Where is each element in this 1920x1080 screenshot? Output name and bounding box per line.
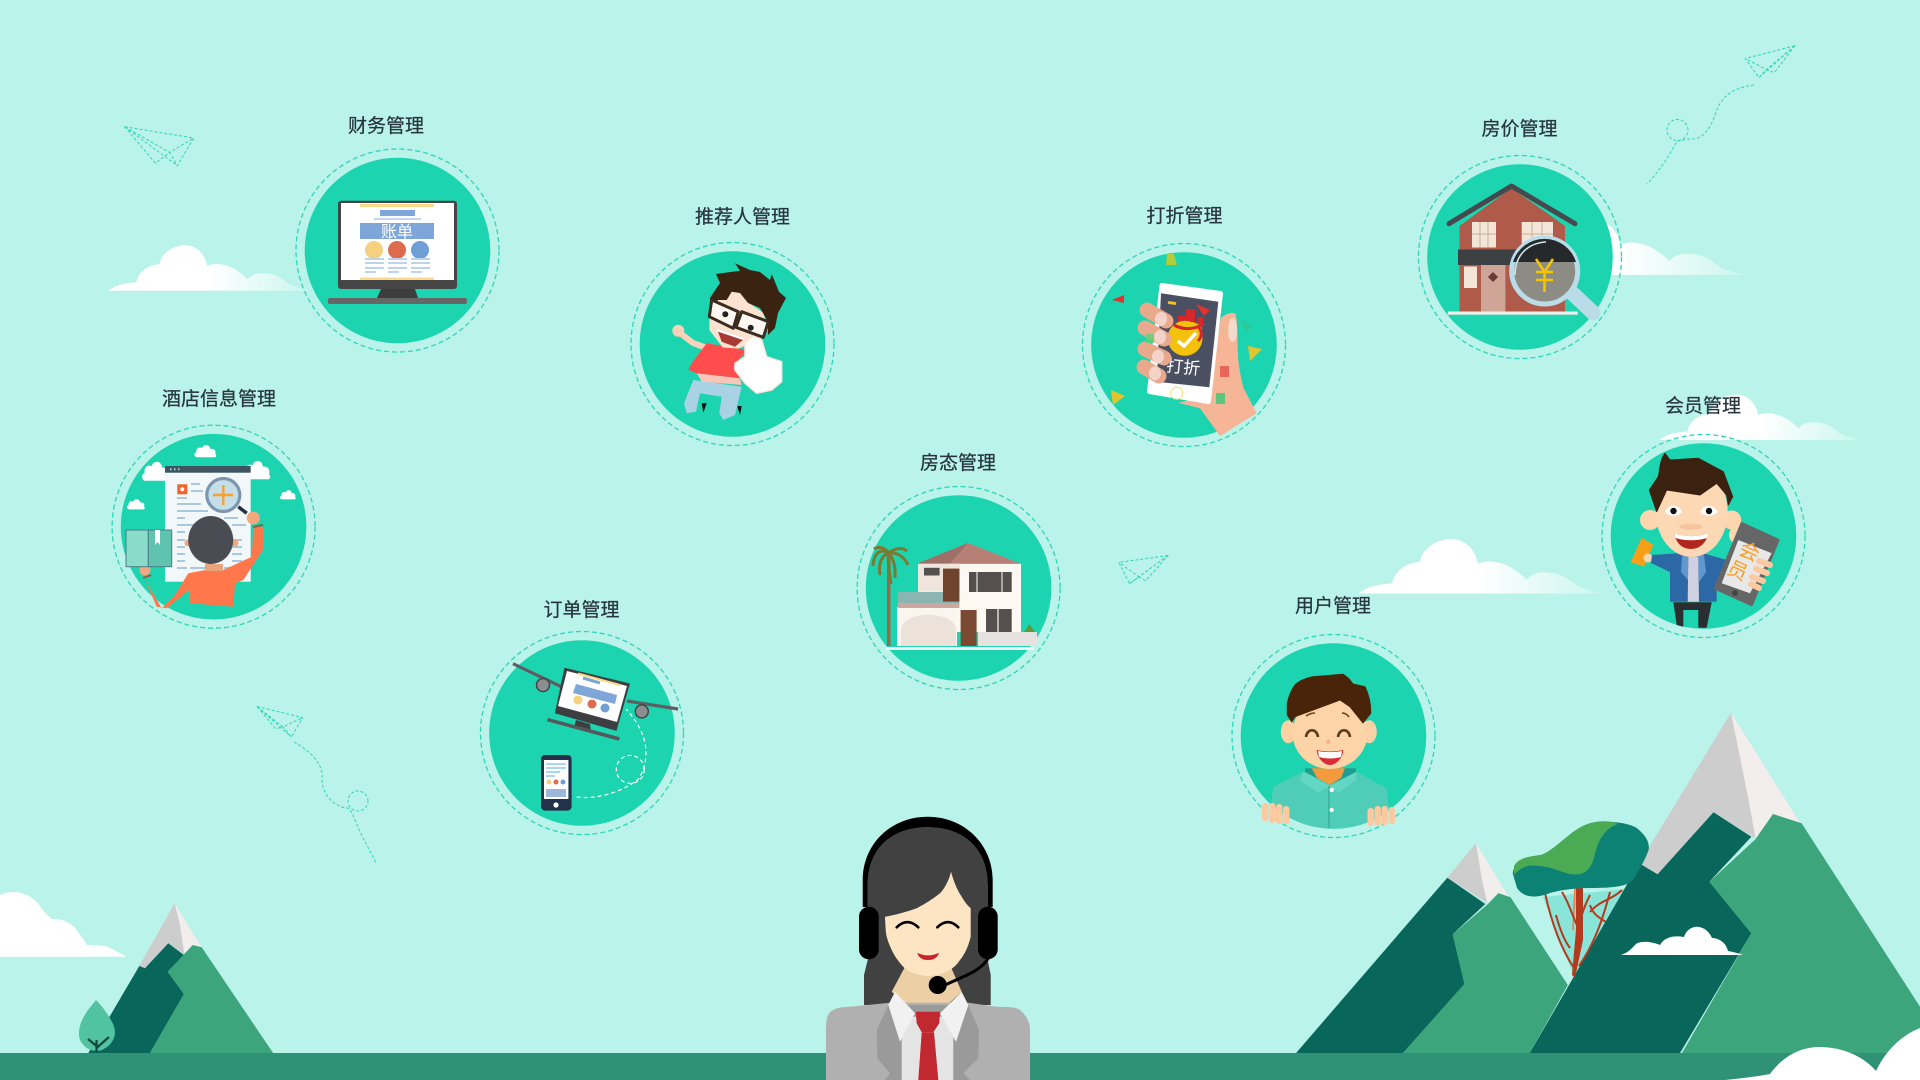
panel: user management bbox=[1232, 595, 1435, 838]
icon: thumbs-up boy bbox=[672, 263, 786, 420]
paper plane: lower left with trail bbox=[257, 706, 376, 863]
icon: man with membership phone: 员 bbox=[1724, 557, 1751, 586]
character: customer service woman with headset bbox=[826, 817, 1030, 1080]
icon: hand holding phone: 打折 bbox=[1165, 356, 1201, 379]
bottom right cloud bbox=[1725, 1028, 1920, 1080]
cloud: behind member label bbox=[1660, 394, 1861, 440]
icon: flying monitor and phone bbox=[513, 664, 678, 811]
small cloud on mountain bbox=[1621, 927, 1743, 955]
cloud: behind finance circle bbox=[108, 245, 310, 291]
icon: house with magnifier bbox=[1448, 186, 1593, 315]
heading: order: 订单管理 bbox=[543, 599, 620, 621]
panel: discount management bbox=[1082, 205, 1286, 446]
icon: person reading document bbox=[126, 445, 296, 608]
heading: member: 会员管理 bbox=[1665, 395, 1741, 417]
icon: fingers bbox=[1144, 310, 1167, 380]
icon: man with membership phone: 会 bbox=[1735, 537, 1763, 567]
panel: referrer management bbox=[631, 206, 834, 446]
paper plane: top right with trail bbox=[1647, 46, 1795, 184]
icon: smiling user bbox=[1262, 674, 1395, 832]
left mountain bbox=[88, 903, 273, 1053]
icon: villa and palm tree bbox=[873, 543, 1037, 650]
icon: man with membership phone bbox=[1631, 453, 1778, 628]
panel: hotel information management bbox=[112, 388, 315, 628]
panel: finance management bbox=[296, 115, 499, 352]
heading: hotel information: 酒店信息管理 bbox=[162, 388, 276, 410]
tree on right mountains bbox=[1513, 821, 1649, 978]
cloud: above user circle bbox=[1358, 539, 1602, 593]
panel: room price management bbox=[1418, 118, 1622, 358]
icon: monitor bill: 账单 bbox=[381, 223, 413, 241]
paper plane: centre bbox=[1119, 556, 1168, 584]
heading: referrer: 推荐人管理 bbox=[695, 206, 790, 228]
icon: hand holding phone bbox=[1111, 254, 1262, 436]
heading: finance: 财务管理 bbox=[348, 115, 424, 137]
paper plane: top left bbox=[125, 127, 194, 166]
heading: discount: 打折管理 bbox=[1146, 205, 1223, 227]
panel: member management bbox=[1602, 395, 1805, 638]
panel: room status management bbox=[857, 452, 1060, 690]
heading: room status: 房态管理 bbox=[920, 452, 996, 474]
left cloud bbox=[0, 892, 126, 957]
small tree bbox=[79, 1000, 115, 1052]
panel: order management bbox=[480, 599, 684, 834]
ground bbox=[0, 1053, 1920, 1080]
right mountains bbox=[1294, 713, 1920, 1056]
icon: user hands bbox=[1262, 803, 1395, 826]
heading: user: 用户管理 bbox=[1295, 595, 1371, 617]
cloud: behind room price circle bbox=[1501, 220, 1745, 275]
heading: room price: 房价管理 bbox=[1481, 118, 1558, 140]
icon: monitor bill bbox=[328, 201, 467, 304]
